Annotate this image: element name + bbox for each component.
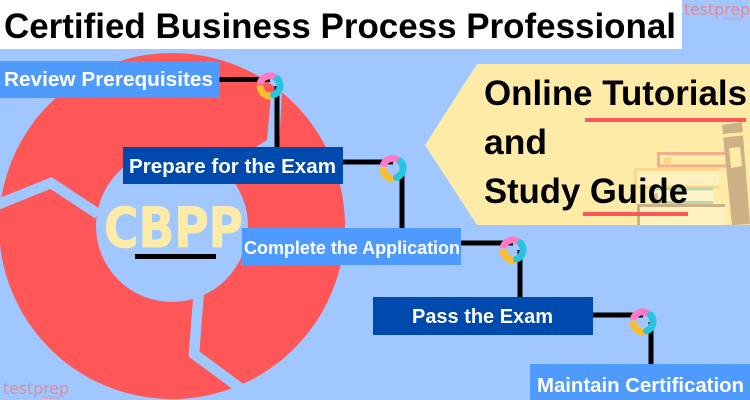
title banner: Certified Business Process Professional — [4, 7, 676, 46]
illustration: books — [636, 122, 750, 225]
icon: step node 4 — [633, 312, 653, 332]
connector: step 4 to step 5 — [593, 315, 651, 364]
icon: step node 2 — [383, 158, 403, 179]
callout: online tutorials pentagon: Study Guide — [484, 172, 688, 211]
step 5: maintain certification: Maintain Certification — [537, 375, 744, 397]
logo: testprep bottom left: testprep — [3, 379, 69, 398]
step 4: pass the exam — [373, 297, 593, 335]
callout: online tutorials pentagon — [425, 64, 750, 225]
logo: testprep top right: testprep — [684, 0, 750, 19]
callout: online tutorials pentagon: and — [484, 123, 547, 162]
icon: step node 3 — [503, 240, 523, 260]
step 3: complete the application — [242, 228, 461, 265]
center label: CBPP: CBPP — [104, 196, 243, 260]
step 1: review prerequisites — [0, 61, 220, 98]
connector: step 2 to step 3 — [343, 162, 402, 228]
step 5: maintain certification — [530, 364, 750, 400]
connector: step 3 to step 4 — [461, 243, 520, 297]
step 4: pass the exam: Pass the Exam — [412, 306, 553, 328]
step 2: prepare for the exam: Prepare for the Exam — [129, 156, 336, 178]
step 3: complete the application: Complete the Application — [244, 238, 460, 258]
step 1: review prerequisites: Review Prerequisites — [4, 69, 213, 91]
icon: step node 1 — [260, 76, 280, 96]
segmented red ring — [0, 90, 296, 391]
connector: step 1 to step 2 — [219, 80, 277, 147]
logo: testprep top right: training — [723, 16, 741, 22]
callout: online tutorials pentagon: Online Tutorials — [484, 74, 747, 113]
step 2: prepare for the exam — [123, 147, 343, 184]
